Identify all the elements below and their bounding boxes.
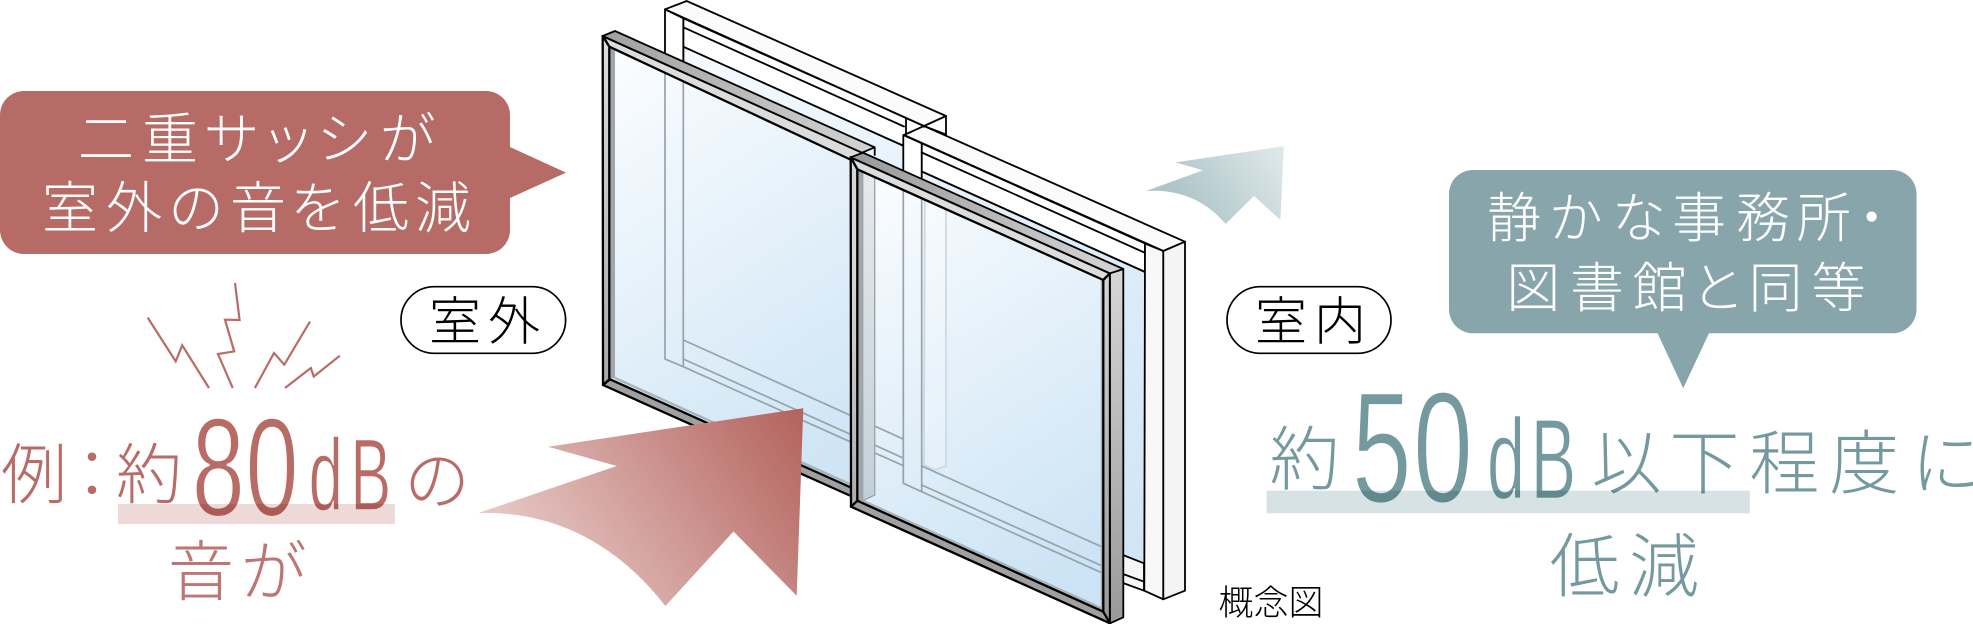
callout: double sash reduces outdoor sound: 室外の音を低減 [42,177,471,240]
front sash right [851,134,1123,623]
label: indoor: 室内 [1255,294,1366,352]
icon: noise lightning bolts [148,283,340,388]
label: outdoor [401,287,566,353]
text: example about 80dB sound: 80 [192,390,298,546]
panel: indoor side [1218,170,1973,623]
back frame right [903,126,1185,599]
illustration: double sash window [603,1,1185,623]
text: reduced to about 50dB or less: 約 [1270,421,1340,499]
text: reduced to about 50dB or less: 50 [1352,359,1473,536]
text: example about 80dB sound: 音が [168,535,307,609]
text: reduced to about 50dB or less [1270,359,1973,606]
text: example about 80dB sound: dB [309,418,391,532]
callout: same as a quiet office or library: 図書館と同等 [1506,259,1866,319]
text: reduced to about 50dB or less: dB [1487,395,1576,523]
callout: double sash reduces outdoor sound: 二重サッシが [78,108,436,171]
callout: double sash reduces outdoor sound [0,91,566,254]
callout: same as a quiet office or library [1449,170,1916,388]
arrow: reduced sound indoors [1146,146,1284,224]
front sash left [602,30,876,497]
arrow: incoming outdoor sound [478,408,803,606]
text: example about 80dB sound [1,390,470,609]
underline highlight: 80dB [118,504,395,524]
label: indoor [1227,287,1391,353]
text: example about 80dB sound: 例：約 [1,438,182,512]
label: outdoor: 室外 [429,294,540,352]
panel: outdoor side [0,91,566,609]
callout: same as a quiet office or library: 静かな事務所・ [1487,189,1899,249]
underline highlight: 50dB [1267,491,1750,513]
text: reduced to about 50dB or less: 以下程度に [1592,425,1973,503]
text: example about 80dB sound: の [404,444,470,518]
back frame left [665,1,946,367]
caption: conceptual diagram: 概念図 [1218,584,1324,623]
text: reduced to about 50dB or less: 低減 [1550,528,1699,606]
